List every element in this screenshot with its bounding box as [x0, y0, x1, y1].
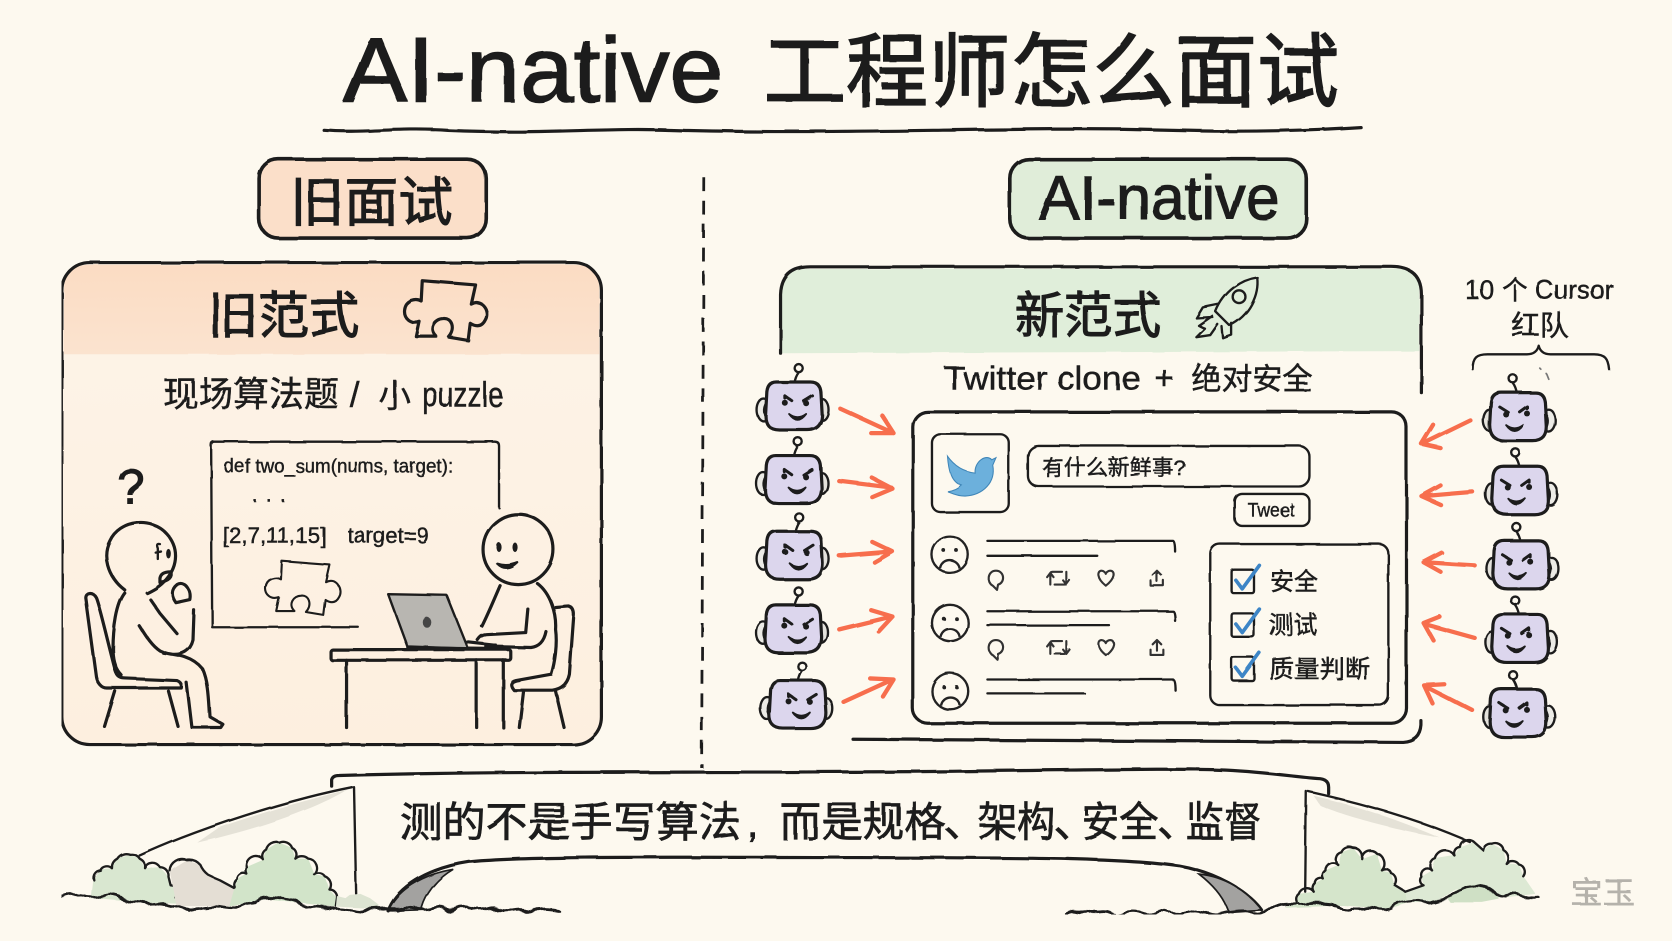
tweet row 3 — [932, 673, 1175, 709]
right fold — [1200, 875, 1261, 912]
bush 7 — [1447, 885, 1499, 902]
robot 6 — [1483, 375, 1555, 441]
icon: rocket — [1196, 277, 1257, 338]
compose input: 有什么新鲜事? — [1042, 456, 1186, 480]
head — [483, 514, 553, 585]
check: quality judgement — [1232, 653, 1370, 683]
robot 4 — [756, 587, 828, 653]
check: security — [1232, 565, 1318, 596]
panel header band — [64, 265, 599, 354]
bracket — [1473, 346, 1609, 369]
checklist — [1210, 544, 1388, 705]
ground left — [62, 894, 560, 912]
tweet row 2 — [932, 605, 1175, 659]
panel outline — [62, 263, 601, 745]
body — [467, 584, 556, 674]
subheading: 现场算法题 — [163, 376, 339, 415]
subheading: 绝对安全 — [1191, 361, 1313, 396]
bush 3 — [229, 842, 337, 907]
arrow 6 — [1421, 420, 1470, 448]
label: 10 cursor red team — [1465, 275, 1613, 341]
whiteboard — [211, 442, 499, 627]
title: 工程师怎么面试 — [763, 28, 1339, 118]
interviewer — [467, 514, 574, 727]
table — [331, 650, 511, 727]
whiteboard: ... — [252, 482, 286, 506]
right shade — [1314, 796, 1440, 837]
robot 9 — [1485, 597, 1557, 662]
icon: bird — [948, 457, 996, 496]
laptop — [388, 594, 499, 649]
check: tests — [1232, 609, 1318, 640]
check: tests: 测试 — [1269, 612, 1318, 640]
logo box — [932, 434, 1009, 512]
label: 10 cursor red team: 红队 — [1511, 310, 1569, 341]
robot 10 — [1483, 671, 1555, 737]
robot 1 — [757, 364, 829, 430]
arrow 3 — [839, 542, 893, 562]
left curve — [140, 787, 352, 855]
bush 4 — [336, 894, 379, 909]
bushes left — [91, 842, 379, 909]
left side — [354, 787, 356, 894]
robot 3 — [757, 513, 829, 579]
twitter clone window — [913, 412, 1406, 723]
title: AI-native — [343, 20, 723, 122]
arrow 4 — [839, 610, 893, 632]
robot 5 — [760, 663, 832, 729]
right arrows — [1421, 420, 1475, 710]
panel outline — [781, 267, 1421, 393]
candidate with question mark: ? — [117, 461, 145, 515]
panel: old paradigm — [62, 263, 601, 745]
check: security: 安全 — [1270, 568, 1318, 596]
bushes right — [1285, 840, 1536, 909]
arrow 10 — [1424, 684, 1473, 710]
tweet row 1 — [932, 537, 1175, 590]
subheading: / — [350, 376, 360, 415]
heading: old paradigm: 旧范式 — [208, 288, 359, 344]
bush 1 — [91, 854, 183, 904]
check: quality judgement: 质量判断 — [1269, 655, 1370, 683]
left shade — [197, 789, 348, 843]
bush 2 — [170, 859, 237, 907]
tab: old interview — [259, 159, 486, 238]
right side — [1305, 791, 1306, 892]
arrow 7 — [1421, 485, 1473, 505]
whiteboard: target=9 — [348, 523, 429, 548]
sparks — [1540, 368, 1548, 379]
right curve — [1308, 791, 1469, 842]
tab: AI-native: AI-native — [1039, 164, 1280, 233]
icon: puzzle piece — [404, 281, 487, 340]
banner slogan: 监督 — [1186, 798, 1261, 845]
whiteboard: [2,7,11,15] — [223, 523, 326, 548]
chair — [511, 606, 574, 727]
subheading: puzzle — [422, 376, 503, 415]
title underline — [324, 127, 1361, 132]
arrow 9 — [1424, 617, 1475, 640]
banner top — [332, 769, 1329, 794]
arrow 8 — [1424, 553, 1475, 572]
banner slogan: 测的不是手写算法 — [400, 798, 741, 845]
bush 5 — [1285, 847, 1408, 909]
subheading — [944, 360, 1313, 397]
watermark: 宝玉 — [1571, 875, 1635, 910]
head — [106, 522, 176, 593]
right robots group — [1465, 275, 1613, 737]
left arrows — [839, 409, 894, 702]
arrow 2 — [839, 478, 893, 497]
heading: new paradigm: 新范式 — [1015, 288, 1161, 344]
banner slogan: 、 — [1054, 798, 1095, 845]
label: 10 cursor red team: 10 个 Cursor — [1465, 275, 1613, 305]
robot 7 — [1485, 448, 1557, 514]
candidate with question mark — [85, 461, 223, 727]
divider — [702, 177, 704, 768]
subheading — [163, 376, 503, 415]
banner slogan: 安全 — [1081, 798, 1158, 845]
arch — [388, 857, 1261, 911]
robot 8 — [1486, 523, 1558, 589]
bush 6 — [1405, 840, 1536, 902]
green header band — [782, 269, 1419, 353]
ground right — [1066, 886, 1540, 914]
code text: def two_sum(nums, target): — [224, 457, 453, 478]
tab: old interview: 旧面试 — [290, 174, 453, 233]
title — [343, 20, 1339, 122]
banner slogan: 、 — [1157, 798, 1199, 845]
subheading: Twitter clone — [944, 360, 1141, 397]
panel: new paradigm — [781, 267, 1421, 742]
arrow 5 — [843, 678, 894, 702]
banner slogan: , — [746, 798, 758, 845]
left fold — [388, 869, 453, 911]
banner slogan: 、 — [944, 798, 985, 845]
subheading: 小 — [379, 378, 411, 414]
icon: small puzzle — [266, 561, 340, 615]
robot 2 — [756, 438, 828, 504]
compose input — [1028, 446, 1309, 486]
chair — [85, 593, 181, 726]
body — [113, 583, 223, 727]
banner slogan: 而是规格 — [779, 798, 946, 845]
arrow 1 — [840, 409, 894, 433]
left robots — [756, 364, 832, 729]
bottom bridge banner — [140, 769, 1469, 912]
tweet button — [1235, 494, 1309, 526]
tweet button: Tweet — [1248, 500, 1295, 521]
panel background — [62, 263, 601, 745]
subheading: + — [1155, 360, 1174, 397]
banner slogan: 架构 — [978, 798, 1056, 845]
